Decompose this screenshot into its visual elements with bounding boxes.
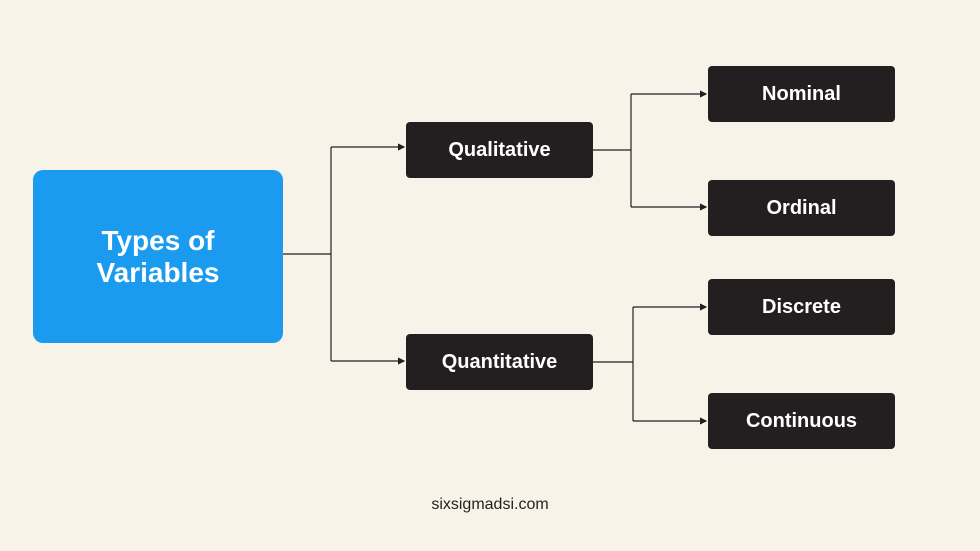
main box: Types of Variables: Types of [101,224,215,256]
box: Discrete: Discrete [762,296,841,318]
footer: sixsigmadsi.com [431,496,549,513]
box: Nominal [708,66,895,122]
box: Continuous [708,393,895,449]
box: Qualitative: Qualitative [448,138,551,160]
box: Ordinal [708,180,895,236]
box: Discrete [708,279,895,335]
box: Quantitative: Quantitative [442,350,557,372]
box: Nominal: Nominal [762,82,841,104]
box: Ordinal: Ordinal [766,196,836,218]
box: Continuous: Continuous [746,410,857,432]
main box: Types of Variables: Variables [96,256,219,288]
box: Qualitative [406,122,593,178]
box: Quantitative [406,334,593,390]
main box: Types of Variables [33,170,283,343]
